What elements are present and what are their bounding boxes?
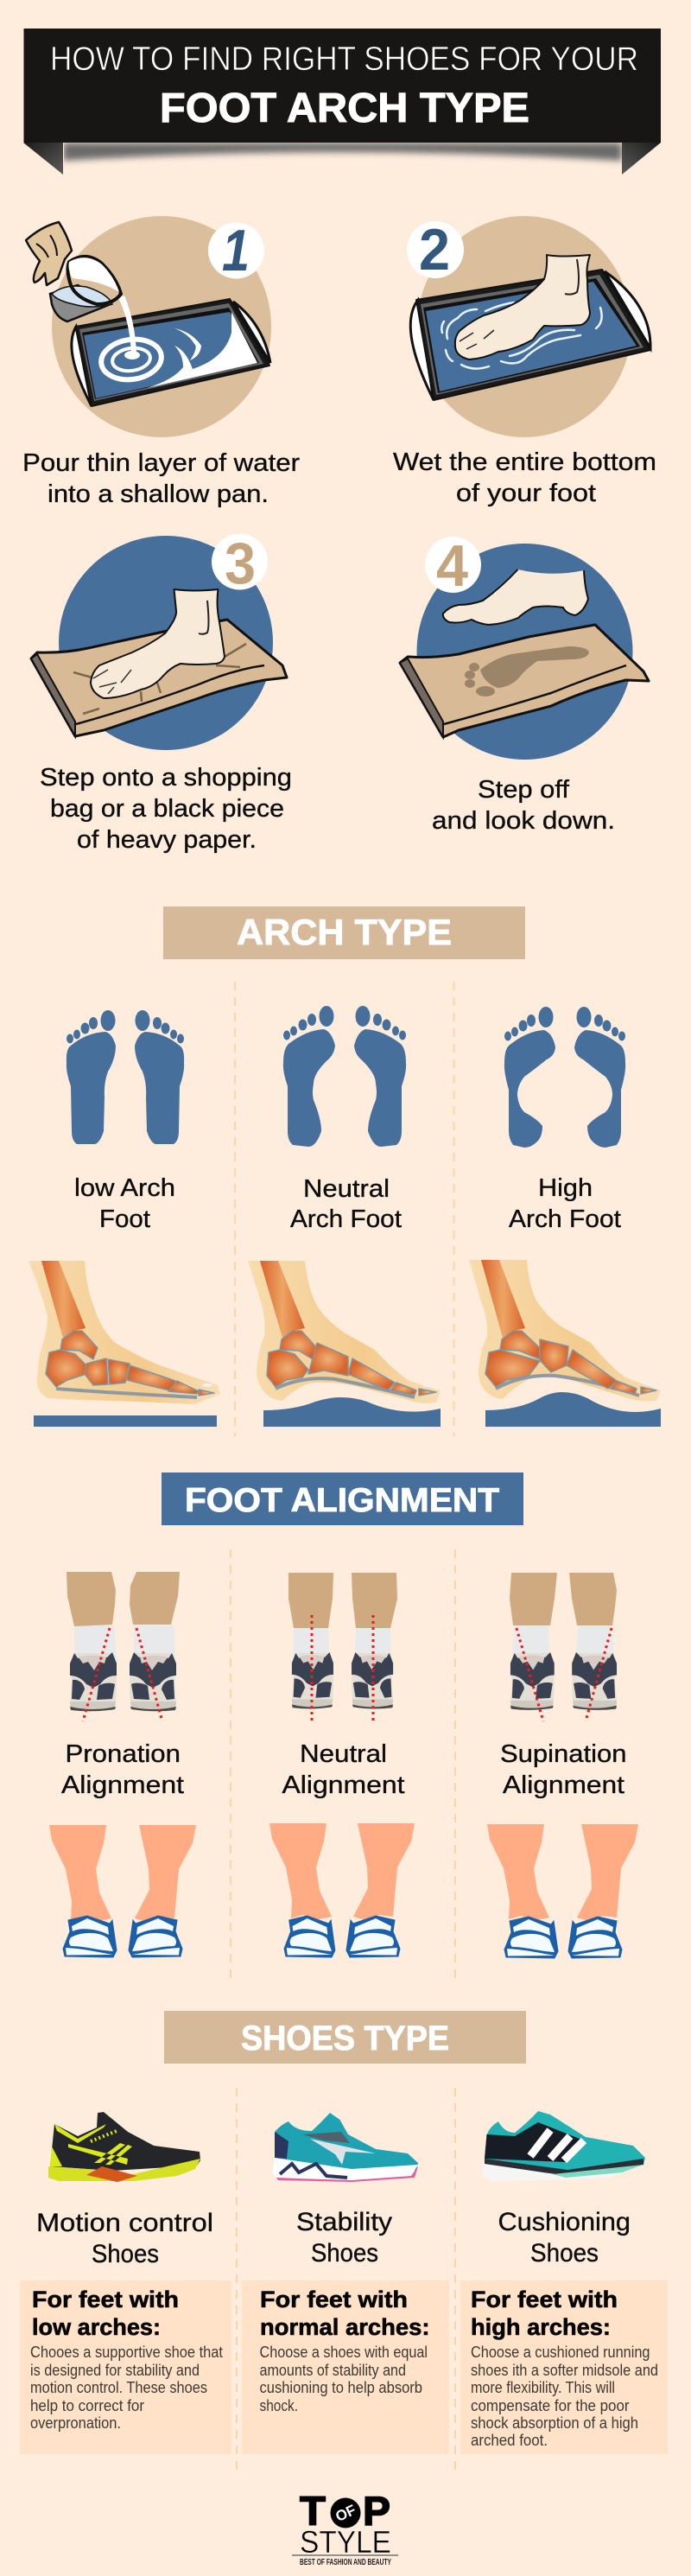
diagram: supination rear view (510, 1573, 617, 1721)
icon: foot lifted over footprint (400, 569, 649, 737)
diagram: neutral front view (269, 1823, 415, 1957)
icon: high arch footprints (504, 1007, 625, 1148)
panel: low arches advice (20, 2280, 231, 2454)
number badge 4: 4 (436, 533, 468, 599)
label: supination alignment: Alignment (503, 1771, 624, 1799)
panel: step 4 (400, 533, 649, 835)
heading: arch type: ARCH TYPE (237, 912, 452, 952)
panel: low arches advice: overpronation. (30, 2414, 121, 2432)
caption step 1: into a shallow pan. (48, 480, 269, 508)
diagram: neutral arch foot bones (248, 1261, 441, 1427)
label: neutral alignment: Alignment (282, 1771, 404, 1799)
caption step 3: Step onto a shopping (40, 764, 292, 792)
label: motion control shoes: Shoes (92, 2240, 159, 2268)
heading: foot alignment (162, 1472, 523, 1525)
heading: foot alignment: FOOT ALIGNMENT (185, 1482, 499, 1519)
column: high arch (469, 1007, 661, 1427)
caption step 3: of heavy paper. (77, 826, 257, 854)
caption step 4: Step off (478, 776, 570, 804)
column: motion control shoes (20, 2112, 231, 2454)
column: pronation (49, 1572, 196, 1957)
label: low arch foot: low Arch (74, 1174, 175, 1202)
caption step 2: of your foot (456, 480, 596, 507)
number badge 3: 3 (225, 531, 256, 596)
label: cushioning shoes (498, 2208, 631, 2268)
icon: pan with poured water (26, 222, 270, 406)
panel: high arches advice (460, 2280, 668, 2454)
caption step 2 (393, 448, 656, 507)
label: neutral alignment (282, 1740, 404, 1799)
column: neutral arch (248, 1006, 441, 1427)
logo: top of style (292, 2488, 398, 2567)
label: pronation alignment: Alignment (61, 1771, 184, 1799)
label: supination alignment (500, 1740, 627, 1799)
caption step 3 (40, 764, 292, 854)
panel: high arches advice: compensate for the poor (471, 2397, 629, 2414)
diagram: neutral rear view (288, 1573, 397, 1721)
panel: normal arches advice (242, 2280, 449, 2454)
label: neutral arch foot (290, 1175, 402, 1233)
label: pronation alignment (61, 1740, 184, 1799)
icon: black and yellow motion control shoe (48, 2112, 200, 2182)
icon: teal stability shoe (273, 2113, 418, 2182)
caption step 4 (432, 776, 615, 835)
number badge 2: 2 (419, 217, 450, 283)
label: stability shoes: Shoes (311, 2239, 378, 2268)
number badge 4 (425, 533, 481, 599)
label: pronation alignment: Pronation (66, 1740, 181, 1768)
panel: high arches advice: high arches: (471, 2314, 611, 2340)
panel: normal arches advice: normal arches: (260, 2314, 430, 2340)
panel: normal arches advice: amounts of stability and (259, 2362, 406, 2379)
label: cushioning shoes: Shoes (530, 2239, 599, 2268)
panel: low arches advice: help to correct for (30, 2397, 144, 2414)
label: high arch foot (509, 1174, 621, 1233)
icon: footprint (465, 646, 589, 696)
diagram: pronation front view (49, 1825, 196, 1957)
panel: step 1 (22, 216, 300, 508)
icon: foot in wet pan (410, 255, 650, 400)
panel: high arches advice: For feet with (471, 2287, 618, 2312)
column: stability shoes (242, 2113, 449, 2454)
title banner (23, 29, 661, 177)
column: neutral alignment (269, 1573, 415, 1957)
panel: normal arches advice: For feet with (260, 2287, 408, 2312)
panel: low arches advice: motion control. These shoes (30, 2379, 207, 2396)
title banner: FOOT ARCH TYPE (160, 86, 529, 131)
caption step 2: Wet the entire bottom (393, 448, 656, 476)
logo: top of style: T (300, 2488, 326, 2534)
panel: step 2 (393, 216, 656, 507)
number badge 2 (407, 217, 464, 283)
label: neutral arch foot: Arch Foot (290, 1205, 402, 1233)
caption step 1: Pour thin layer of water (22, 449, 300, 477)
panel: high arches advice: Choose a cushioned running (471, 2344, 650, 2361)
diagram: supination front view (487, 1824, 638, 1958)
icon: teal cushioning shoe (483, 2111, 645, 2181)
diagram: pronation rear view (67, 1572, 180, 1721)
label: motion control shoes: Motion control (36, 2209, 213, 2237)
logo: top of style: OF (333, 2502, 358, 2525)
label: cushioning shoes: Cushioning (498, 2208, 631, 2236)
panel: normal arches advice: Choose a shoes with equal (259, 2344, 428, 2361)
label: low arch foot (74, 1174, 175, 1233)
panel: low arches advice: low arches: (32, 2314, 161, 2340)
panel: step 3 (31, 531, 292, 854)
caption step 1 (22, 449, 300, 508)
panel: normal arches advice: shock. (259, 2397, 298, 2414)
panel: high arches advice: shock absorption of a high (471, 2414, 638, 2432)
column: supination (487, 1573, 638, 1958)
label: neutral alignment: Neutral (300, 1740, 387, 1768)
caption step 3: bag or a black piece (50, 795, 284, 823)
column: low arch (29, 1010, 220, 1427)
logo: top of style: BEST OF FASHION AND BEAUTY (300, 2557, 391, 2567)
icon: foot stepping on paper bag (31, 589, 287, 736)
panel: low arches advice: Chooes a supportive shoe that (30, 2344, 223, 2361)
diagram: high arch foot bones (469, 1260, 661, 1427)
logo: top of style: STYLE (300, 2524, 391, 2560)
number badge 3 (212, 531, 268, 596)
title banner: HOW TO FIND RIGHT SHOES FOR YOUR (50, 41, 638, 78)
label: supination alignment: Supination (500, 1740, 627, 1768)
number badge 1 (208, 218, 264, 283)
label: stability shoes: Stability (296, 2208, 392, 2236)
number badge 1: 1 (222, 218, 250, 283)
label: motion control shoes (36, 2209, 213, 2268)
icon: pouring hand and cup (26, 222, 121, 321)
label: stability shoes (296, 2208, 392, 2268)
heading: shoes type (164, 2011, 526, 2064)
caption step 4: and look down. (432, 807, 615, 835)
panel: high arches advice: shoes ith a softer midsole and (471, 2362, 658, 2379)
icon: neutral arch footprints (283, 1006, 406, 1147)
icon: low arch footprints (67, 1010, 184, 1144)
column: cushioning shoes (460, 2111, 668, 2454)
heading: arch type (163, 906, 525, 959)
panel: high arches advice: arched foot. (471, 2432, 548, 2449)
label: neutral arch foot: Neutral (303, 1175, 390, 1203)
panel: low arches advice: For feet with (32, 2287, 179, 2312)
label: low arch foot: Foot (99, 1205, 150, 1233)
logo: top of style: P (363, 2488, 390, 2534)
label: high arch foot: Arch Foot (509, 1205, 621, 1233)
panel: normal arches advice: cushioning to help absorb (259, 2379, 422, 2396)
diagram: low arch foot bones (29, 1261, 220, 1427)
panel: low arches advice: is designed for stability and (30, 2362, 200, 2379)
panel: high arches advice: more flexibility. This will (471, 2379, 615, 2396)
label: high arch foot: High (538, 1174, 593, 1202)
heading: shoes type: SHOES TYPE (241, 2019, 449, 2058)
